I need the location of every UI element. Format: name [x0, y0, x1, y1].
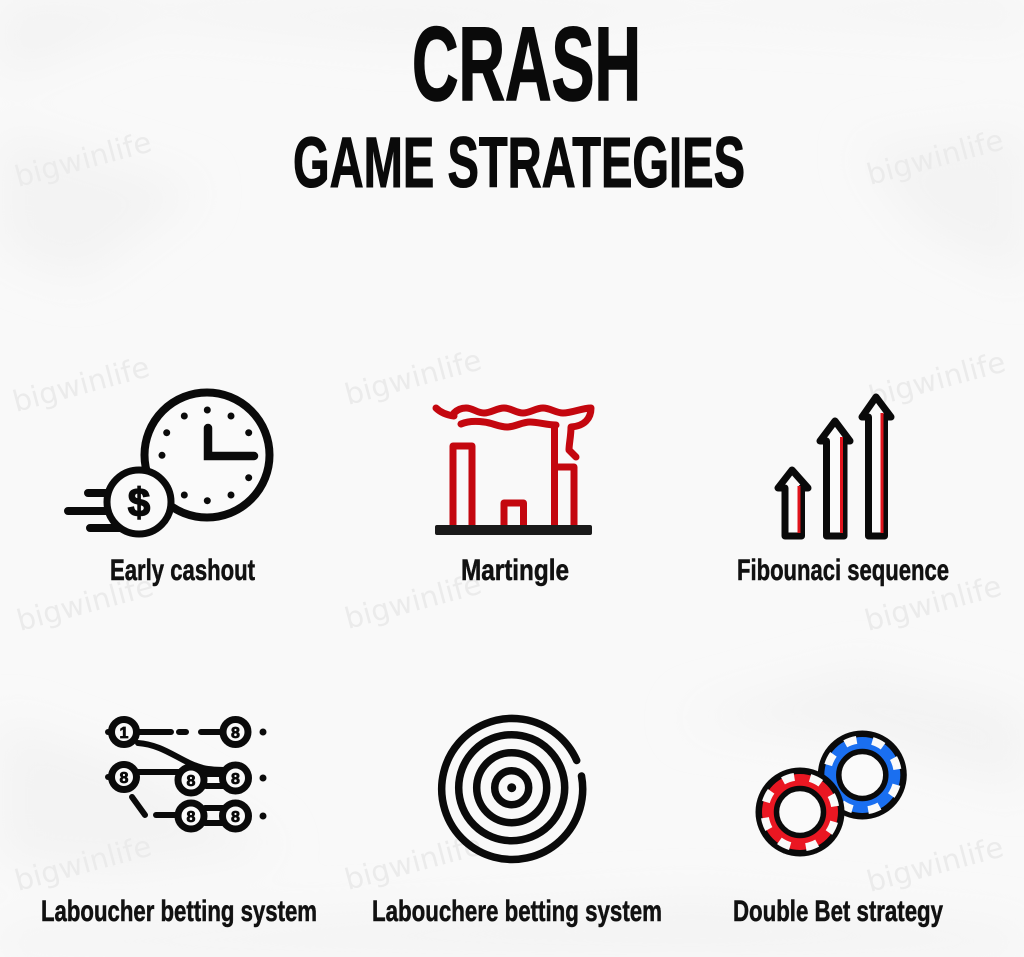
icon: three rising arrows	[778, 397, 891, 536]
label: labouchere betting system: Labouchere betting system	[372, 895, 662, 928]
panel: early cashout	[68, 392, 270, 587]
icon: clock with coin	[68, 392, 270, 534]
watermarks: bigwinlife	[861, 569, 1005, 638]
watermarks: bigwinlife	[341, 828, 485, 897]
label: laboucher betting system: Laboucher betting system	[41, 895, 317, 928]
icon: number node network: 8	[120, 770, 129, 787]
icon: number node network	[105, 720, 266, 829]
icon: number node network: 8	[231, 809, 240, 826]
watermarks: bigwinlife	[341, 567, 485, 636]
watermarks: bigwinlife	[11, 829, 155, 898]
icon: number node network: 8	[187, 773, 196, 790]
icon: number node network: 8	[231, 725, 240, 742]
label: early cashout: Early cashout	[110, 554, 255, 587]
panel: labouchere network	[41, 720, 317, 928]
title: GAME STRATEGIES	[293, 124, 745, 203]
watermarks: bigwinlife	[11, 125, 155, 194]
watermarks: bigwinlife	[863, 830, 1007, 899]
icon: clock with coin: $	[128, 481, 150, 525]
watermarks: bigwinlife	[13, 569, 157, 638]
label: double bet strategy: Double Bet strategy	[733, 895, 943, 928]
panel: fibonacci sequence	[737, 397, 949, 587]
label: martingle: Martingle	[461, 554, 569, 587]
icon: blue poker chip	[818, 730, 907, 820]
panel: double bet	[733, 730, 943, 928]
label: fibonacci sequence: Fibounaci sequence	[737, 554, 949, 587]
icon: number node network: 8	[187, 809, 196, 826]
icon: number node network: 1	[120, 725, 129, 742]
icon: baseline bar	[435, 525, 592, 535]
icon: red crashing bars	[436, 408, 591, 525]
title	[293, 6, 745, 203]
watermarks: bigwinlife	[863, 123, 1007, 192]
icon: number node network: 8	[231, 771, 240, 788]
watermarks	[9, 123, 1009, 899]
watermarks: bigwinlife	[865, 345, 1009, 414]
panel: labouchere target	[372, 718, 662, 928]
icon: red poker chip	[756, 768, 844, 856]
watermarks: bigwinlife	[9, 350, 153, 419]
panel: martingale	[435, 408, 592, 587]
icon: concentric target	[442, 718, 583, 859]
title: CRASH	[412, 6, 641, 123]
watermarks: bigwinlife	[341, 343, 485, 412]
